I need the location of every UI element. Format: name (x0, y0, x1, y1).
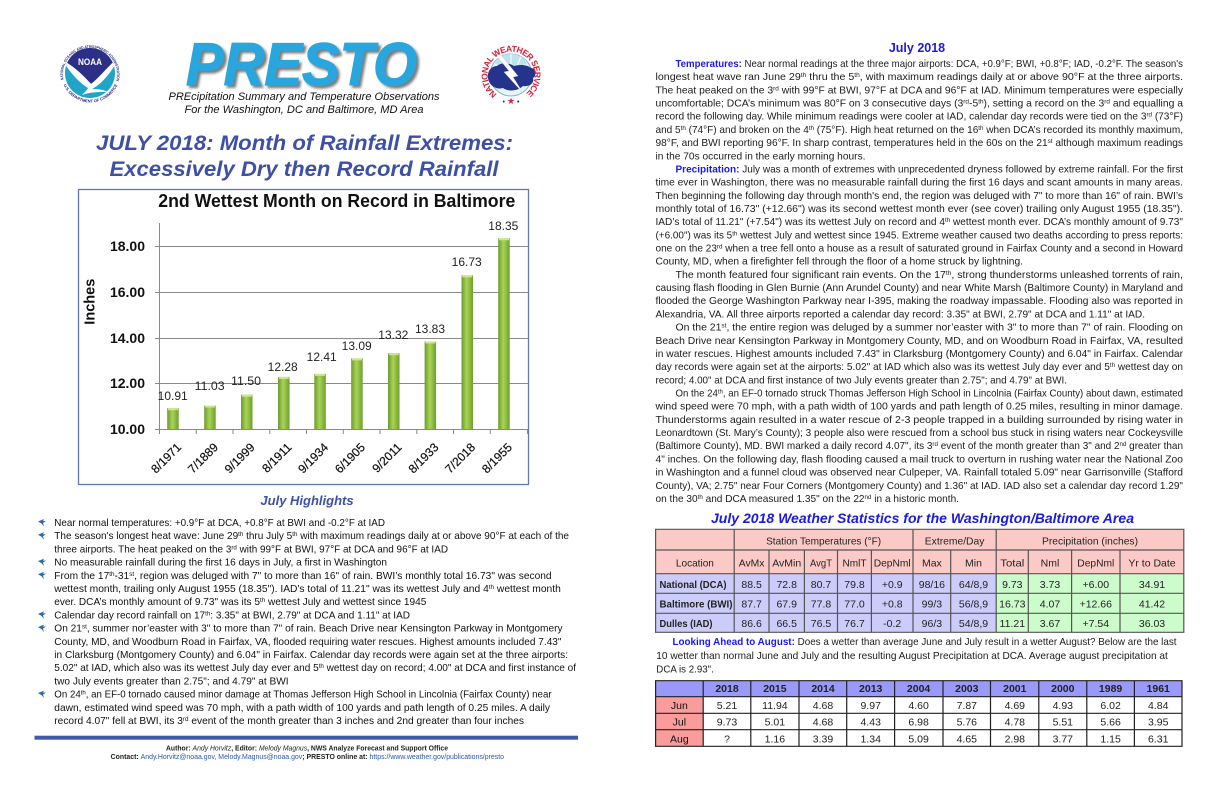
data labels: 11.03 (195, 381, 225, 393)
list: July highlights bullets: The season's longest heat wave: June 29 (54, 530, 247, 542)
x axis labels: 7/1889 (185, 440, 221, 476)
list: July highlights bullets: : 3.35" at BWI, 2.79" at DCA and 1.11" at IAD (210, 609, 410, 621)
row: June: 11.94 (762, 700, 788, 712)
text block: temperatures: when DCA’s recorded its monthly maximum, (983, 124, 1183, 136)
list: July highlights bullets: in Clarksburg (Montgomery County) and 6.04" in Fairfax. Calendar day records were again set at the three airports: (54, 649, 568, 661)
text block: 24th tornado: wind speed were 70 mph, with a path width of 100 yards and path length of 0.25 miles, resulting in minor damage. (655, 401, 1183, 413)
list: July highlights bullets: th (292, 531, 298, 538)
row: Baltimore: +12.66 (1080, 598, 1112, 610)
list: July highlights bullets: th (319, 663, 324, 670)
text block: 24th tornado: in a historic month. (872, 493, 959, 505)
row: June: 4.68 (813, 700, 833, 712)
row: July: Jul (673, 716, 686, 728)
list: July highlights bullets: with maximum readings daily at or above 90°F at each of the (297, 530, 569, 542)
year header row: 1961 (1147, 683, 1170, 695)
text block: temperatures: uncomfortable; DCA’s minimum was 80°F on 3 consecutive days (3 (656, 98, 968, 110)
list: July highlights bullets: with 99°F at BWI, 97°F at DCA and 96°F at IAD (237, 543, 448, 555)
y axis labels (110, 238, 145, 437)
chart title: 2nd Wettest Month on Record in Baltimore (158, 191, 515, 211)
text block: temperatures: longest heat wave ran June 29 (656, 71, 799, 83)
x axis labels: 9/1999 (222, 440, 258, 476)
table header row: Max (922, 558, 943, 570)
text block: precipitation: one on the 23 (656, 242, 720, 254)
text block: temperatures: th (801, 72, 807, 79)
row: National: 88.5 (741, 579, 762, 591)
table header row: NmlT (842, 558, 867, 570)
text block: temperatures: th (978, 125, 984, 132)
row: National (660, 579, 1165, 591)
row: Baltimore: 4.07 (1040, 598, 1060, 610)
row: Dulles: 76.7 (844, 618, 865, 630)
list: July highlights bullets (38, 517, 576, 727)
text block: temperatures: in the 70s occurred in the early morning hours. (656, 150, 866, 162)
row: July: 4.78 (1005, 716, 1025, 728)
text block: precipitation: IAD’s total of 11.21" (+7.54") was its wettest July on record and 4 (656, 216, 956, 228)
list: July highlights bullets: Calendar day record rainfall on 17 (54, 609, 212, 621)
list: July highlights bullets: st (129, 571, 134, 578)
list: July highlights bullets: wettest July and wettest since 1945 (265, 596, 426, 608)
row: August: 1.34 (860, 733, 881, 745)
y axis title: Inches (82, 279, 98, 325)
y axis labels: 10.00 (110, 421, 145, 437)
list: July highlights bullets: On 21 (54, 623, 83, 635)
list: July highlights bullets: th (109, 571, 115, 578)
x axis labels (148, 440, 515, 476)
text block: temperatures: th (809, 125, 814, 132)
year header row: 2014 (811, 683, 835, 695)
row: July: 5.76 (957, 716, 977, 728)
row: National: 98/16 (919, 579, 945, 591)
text block: 24th tornado (655, 388, 1183, 505)
y axis labels: 18.00 (110, 238, 145, 254)
text block: precipitation: (+6.00") was its 5 (656, 229, 737, 241)
row: Dulles: 36.03 (1139, 618, 1165, 630)
data labels: 11.50 (231, 376, 261, 388)
list: July highlights bullets: record 4.07" fell at BWI, its 3 (54, 715, 187, 727)
data labels: 13.32 (378, 330, 408, 342)
y axis labels: 14.00 (110, 330, 145, 346)
x axis labels: 7/2018 (442, 440, 478, 476)
table header row: DepNml (1077, 558, 1114, 570)
list: July highlights bullets: dawn, estimated wind speed was 70 mph, with a path width of 100 yards and path length of 0.25 miles. A daily (54, 702, 551, 714)
heading: July Highlights: July Highlights (260, 493, 354, 508)
data labels (158, 221, 518, 403)
year header row: 2000 (1051, 683, 1075, 695)
text block: 24th tornado: event of the month greater than 3" and 2 (938, 440, 1120, 452)
data labels: 12.28 (268, 362, 298, 374)
text block: temperatures: 98°F, and BWI reporting 96°F. In sharp contrast, temperatures held in the 60s on the 21 (656, 137, 1061, 149)
text block: four rain events (656, 269, 1183, 320)
text block: temperatures (656, 58, 1184, 162)
icon: NOAA logo: NATIONAL OCEANIC AND ATMOSPHERIC ADMINISTRATION (60, 45, 120, 82)
text block: precipitation: rd (717, 244, 723, 250)
text block: temperatures: th (681, 125, 686, 132)
row: June: 4.84 (1148, 700, 1169, 712)
table header row (676, 536, 1176, 570)
row: July: 5.01 (765, 716, 785, 728)
table header row: Nml (1041, 558, 1059, 570)
text block: 24th tornado: On the 24 (676, 388, 722, 400)
text block: precipitation: monthly total of 16.73" (+12.66") was its second wettest month ever (see cover) trailing only August 1955 (18.35"). (656, 203, 1183, 215)
row: August: Aug (670, 733, 689, 745)
list: July highlights bullets: On 24 (54, 689, 83, 701)
list: July highlights bullets: -31 (115, 570, 129, 582)
row: June: Jun (671, 700, 688, 712)
text block: temperatures: rd (963, 98, 969, 106)
icon: National Weather Service logo: NATIONAL WEATHER SERVICE (482, 46, 540, 98)
row: Baltimore (660, 598, 1165, 610)
row: Baltimore: 77.0 (844, 598, 865, 610)
icon: NOAA logo: NOAA (78, 57, 102, 68)
title: PRESTO logo: PRESTO (188, 34, 420, 100)
row: June: 4.93 (1053, 700, 1073, 712)
table header row: Station Temperatures (°F) (766, 536, 881, 548)
text block: 24th tornado: nd (1120, 441, 1127, 448)
row: Dulles: 11.21 (1000, 618, 1025, 630)
y axis labels: 16.00 (110, 284, 145, 300)
text block: temperatures: and 5 (656, 124, 682, 136)
text block: precipitation: Then beginning the following day through month's end, the region was deluged with 7" to more than 16" of rain. BWI’s (656, 190, 1183, 202)
text block: precipitation: th (945, 217, 951, 224)
text block: 21st nor'easter: , the entire region was deluged by a summer nor’easter with 3" to more than 7" of rain. Flooding on (726, 322, 1183, 334)
x axis labels: 8/1911 (259, 440, 295, 475)
x axis labels: 8/1955 (479, 440, 515, 476)
text block: 24th tornado: , an EF-0 tornado struck Thomas Jefferson High School in Lincolnia (Fairfax County) about dawn, estimated (723, 388, 1183, 400)
text block: temperatures: (75°F). High heat returned on the 16 (814, 124, 978, 136)
text block: 21st nor'easter: in water rescues. Highest amounts included 7.43" in Clarksburg (Montgomery County) and 6.04" in Fairfax. Calendar (656, 348, 1183, 360)
table header row: AvgT (810, 558, 833, 570)
text block: 24th tornado: greater than (1126, 440, 1183, 452)
text block: 24th tornado: on the 30 (656, 493, 699, 505)
subtitle: PREcipitation Summary and Temperature Observations (168, 91, 440, 103)
data labels: 18.35 (488, 221, 518, 233)
list: July highlights bullets: wettest month (494, 583, 561, 595)
list: July highlights bullets: 5.02" at IAD, which also was its wettest July day ever and 5 (54, 662, 331, 674)
year header row: 2001 (1003, 683, 1027, 695)
text block: temperatures: rd (1146, 112, 1152, 119)
y axis labels: 12.00 (110, 375, 145, 391)
heading: main title: JULY 2018: Month of Rainfall Extremes: (96, 131, 513, 155)
list: July highlights bullets: th (238, 531, 244, 538)
text block: temperatures: rd (1104, 98, 1110, 106)
bullet icons (38, 519, 46, 698)
table: June, July, August rainfall by year (656, 681, 1182, 746)
row: Baltimore: 67.9 (776, 598, 797, 610)
text block: four rain events: , strong thunderstorms unleashed torrents of rain, (951, 269, 1183, 281)
x axis labels: 6/1905 (332, 440, 368, 476)
list: July highlights bullets: th (489, 584, 494, 591)
row: National: 3.73 (1040, 579, 1060, 591)
row: June: 7.87 (957, 700, 977, 712)
text block: 24th tornado: and DCA measured 1.35" on the 22 (703, 493, 865, 505)
row: National: +0.9 (882, 579, 903, 591)
text block: looking ahead to August: Looking Ahead to August: Does a wetter than average June and July result in a wetter August? Below are the last (672, 636, 1177, 648)
text block: temperatures: Temperatures: Near normal readings at the three major airports: DCA, +0.9°F; BWI, +0.8°F; IAD, -0.2°F. The season's (676, 58, 1183, 70)
text block: precipitation: Precipitation: July was a month of extremes with unprecedented dryness followed by extreme rainfall. For the first (676, 163, 1183, 175)
list: July highlights bullets: st (82, 624, 87, 631)
text block: temperatures: st (1048, 138, 1053, 145)
row: Baltimore: 41.42 (1139, 598, 1165, 610)
text block: 21st nor'easter: On the 21 (676, 322, 722, 334)
subtitle: For the Washington, DC and Baltimore, MD Area (184, 104, 424, 116)
row: National: 80.7 (811, 579, 831, 591)
row: Dulles: 76.5 (811, 618, 831, 630)
text block: precipitation: th (732, 230, 738, 237)
text block: precipitation: wettest July and wettest since 1945. Extreme weather caused two deaths according to press reports: (737, 229, 1183, 241)
row: August: 1.16 (765, 733, 785, 745)
text block: 21st nor'easter: record; 4.00" at DCA and first instance of two July events greater than 2.75"; and 4.79" at BWI. (656, 374, 1067, 386)
row: July: 6.98 (908, 716, 929, 728)
row: Dulles (660, 618, 1165, 630)
row: Dulles: 66.5 (776, 618, 797, 630)
text block: 21st nor'easter: Beach Drive near Kensington Parkway in Montgomery County, MD, and on Woodburn Road in Fairfax, VA, resulted (656, 335, 1183, 347)
text block: temperatures: The heat peaked on the 3 (656, 84, 775, 96)
footer credits: Contact: Andy.Horvitz@noaa.gov, Melody.Magnus@noaa.gov; PRESTO online at: https://www.weather.gov/publications/presto (111, 752, 504, 761)
text block: temperatures: (74°F) and broken on the 4 (686, 124, 809, 136)
text block: temperatures: (73°F) (1152, 111, 1183, 123)
row: Dulles: 96/3 (922, 618, 942, 630)
text block: looking ahead to August (656, 636, 1177, 675)
text block: 21st nor'easter: th (1110, 362, 1115, 369)
row: Baltimore: 77.8 (811, 598, 831, 610)
text block: precipitation: wettest month ever. DCA’s monthly amount of 9.73" (950, 216, 1183, 228)
table header row: Min (965, 558, 982, 570)
row: July: 5.51 (1053, 716, 1073, 728)
table: July 2018 weather statistics (656, 529, 1184, 632)
x axis labels: 9/1934 (295, 440, 331, 476)
text block: precipitation: when a tree fell onto a house as a result of saturated ground in Fairfax County and a second in Howard (722, 242, 1183, 254)
row: Dulles: 86.6 (741, 618, 762, 630)
text block: precipitation: County, MD, when a firefighter fell through the floor of a home struck by lightning. (656, 256, 1023, 268)
list: July highlights bullets: rd (183, 716, 189, 723)
row: June: 6.02 (1100, 700, 1121, 712)
row: National: 9.73 (1002, 579, 1023, 591)
list: July highlights bullets: , region was deluged with 7" to more than 16" of rain. BWI’s monthly total 16.73" was second (134, 570, 552, 582)
text block: precipitation: time ever in Washington, there was no measurable rainfall during the first 16 days and scant amounts in many areas. (656, 177, 1183, 189)
text block: 24th tornado: Thunderstorms again resulted in a water rescue of 2-3 people trapped in a building surrounded by rising water in (656, 414, 1183, 426)
footer credits: Author: Andy Horvitz, Editor: Melody Magnus, NWS Analyze Forecast and Support Office (166, 744, 448, 752)
text block: four rain events: causing flash flooding in Glen Burnie (Ann Arundel County) and near White Marsh (Baltimore County) in Maryland and (656, 282, 1183, 294)
table header row: Precipitation (inches) (1042, 536, 1138, 548)
list: July highlights bullets: th (81, 690, 86, 697)
subtitle (168, 91, 440, 116)
table header row: DepNml (874, 558, 911, 570)
text block: temperatures: thru the 5 (806, 71, 854, 83)
text block: temperatures: -5 (969, 98, 978, 110)
text block: 21st nor'easter (656, 322, 1183, 386)
icon: NOAA logo: U.S. DEPARTMENT OF COMMERCE (64, 84, 118, 102)
text block: temperatures: with 99°F at BWI, 97°F at DCA and 96°F at IAD. Minimum temperatures were especially (779, 84, 1184, 96)
row: August: 2.98 (1005, 733, 1025, 745)
row: Dulles: 54/8,9 (959, 618, 988, 630)
text block: 24th tornado: Leonardtown (St. Mary’s County); 3 people also were rescued from a school bus stuck in rising waters near Cockeysville (656, 427, 1183, 439)
row: Baltimore: 56/8,9 (959, 598, 988, 610)
x axis labels: 8/1971 (148, 440, 184, 476)
list: July highlights bullets: No measurable rainfall during the first 16 days in July, a first in Washington (54, 557, 387, 569)
row: June (671, 700, 1169, 712)
year header row: 2018 (715, 683, 739, 695)
year header row: 2004 (907, 683, 930, 695)
row: Dulles: -0.2 (883, 618, 901, 630)
table header row: Total (1000, 558, 1024, 570)
text block: 24th tornado: County), VA; 2.75" near Four Corners (Montgomery County) and 1.36" at IAD. IAD also set a calendar day record 1.29" (656, 480, 1183, 492)
row: National: National (DCA) (660, 579, 726, 591)
row: July (673, 716, 1169, 728)
row: National: +6.00 (1083, 579, 1109, 591)
text block: temperatures: record the following day. While minimum readings were cooler at IAD, calendar day records were tied on the 3 (656, 111, 1166, 123)
text block: four rain events: The month featured four significant rain events. On the 17 (676, 269, 944, 281)
bar chart: 2nd wettest month on record in Baltimore (78, 190, 528, 484)
text block: temperatures: th (978, 98, 984, 106)
list: July highlights bullets: three airports. The heat peaked on the 3 (54, 543, 241, 555)
row: August: 5.09 (908, 733, 929, 745)
row: Baltimore: 87.7 (741, 598, 762, 610)
text block: 24th tornado: nd (865, 494, 872, 501)
year header row: 1989 (1099, 683, 1122, 695)
data labels: 10.91 (158, 391, 188, 403)
text block: 21st nor'easter: wettest day on (1115, 361, 1183, 373)
row: August: ? (724, 733, 730, 745)
table header row: Extreme/Day (925, 536, 985, 548)
heading: weather statistics table: July 2018 Weather Statistics for the Washington/Baltimore Area (711, 510, 1134, 526)
row: June: 4.60 (908, 700, 929, 712)
row: Baltimore: +0.8 (882, 598, 903, 610)
data labels: 13.83 (415, 324, 445, 336)
heading: July 2018: July 2018 (889, 41, 945, 55)
year header row: 2003 (955, 683, 979, 695)
text block: looking ahead to August: 10 wetter than normal June and July and the resulting August Precipitation at DCA. Average august precipitation at (656, 650, 1168, 662)
text block: temperatures: rd (773, 85, 779, 92)
row: July: 5.66 (1100, 716, 1121, 728)
list: July highlights bullets: rd (231, 544, 237, 551)
text block: temperatures: and equalling a (1110, 98, 1183, 110)
row: National: 34.91 (1139, 579, 1165, 591)
data labels: 16.73 (452, 257, 482, 269)
text block: 21st nor'easter: day records were again set at the airports: 5.02" at IAD which also was its wettest July day ever and 5 (656, 361, 1128, 373)
icon: NOAA logo (60, 45, 120, 102)
row: August: 3.77 (1053, 733, 1073, 745)
bar top highlights (168, 238, 509, 410)
row: Baltimore: 16.73 (999, 598, 1026, 610)
row: August (670, 733, 1169, 745)
row: Dulles: Dulles (IAD) (660, 618, 712, 630)
text block: temperatures: , with maximum readings daily at or above 90°F at the three airports. (860, 71, 1183, 83)
list: July highlights bullets: wettest day on record; 4.00" at DCA and first instance of (324, 662, 576, 674)
row: Dulles: 3.67 (1040, 618, 1060, 630)
table header row: Location (676, 558, 714, 570)
list: July highlights bullets: thru July 5 (243, 530, 292, 542)
table header row: AvMin (772, 558, 801, 570)
year header row: 2013 (859, 683, 883, 695)
heading: main title (96, 131, 513, 181)
row: National: 79.8 (844, 579, 865, 591)
year header row: 2015 (763, 683, 787, 695)
row: Baltimore: 99/3 (922, 598, 942, 610)
text block: 24th tornado: th (698, 494, 703, 501)
row: July: 9.73 (717, 716, 737, 728)
row: August: 3.39 (813, 733, 833, 745)
data labels: 13.09 (342, 341, 372, 353)
list: July highlights bullets: ever. DCA’s monthly amount of 9.73" was its 5 (54, 596, 269, 608)
row: July: 4.43 (860, 716, 881, 728)
text block: 24th tornado: 4" inches. On the following day, flash flooding caused a mail truck to overturn in rushing water near the National Zoo (656, 453, 1183, 465)
year header row (715, 683, 1170, 695)
text block: 24th tornado: rd (932, 441, 938, 448)
list: July highlights bullets: th (205, 610, 211, 617)
row: July: 3.95 (1148, 716, 1169, 728)
text block: 24th tornado: th (718, 388, 723, 396)
text block: four rain events: flooded the George Washington Parkway near I-395, making the roadway impassable. Flooding also was reported in (656, 295, 1183, 307)
text block: temperatures: although maximum readings (1053, 137, 1183, 149)
x axis labels: 9/2011 (369, 440, 405, 475)
row: Baltimore: Baltimore (BWI) (660, 598, 732, 610)
list: July highlights bullets: th (260, 597, 266, 604)
text block: precipitation (656, 163, 1183, 268)
data labels: 12.41 (307, 352, 337, 364)
text block: four rain events: Alexandria, VA. All three airports reported a calendar day record: 3.35" at BWI, 2.79" at DCA and 1.11" at IAD. (656, 308, 1145, 320)
list: July highlights bullets: From the 17 (54, 570, 111, 582)
row: National: 64/8,9 (959, 579, 988, 591)
row: July: 4.68 (813, 716, 833, 728)
text block: 21st nor'easter: st (721, 323, 727, 330)
row: June: 5.21 (717, 700, 737, 712)
list: July highlights bullets: , an EF-0 tornado caused minor damage at Thomas Jefferson High School in Lincolnia (Fairfax County) near (86, 689, 552, 701)
bars (167, 238, 510, 429)
row: August: 6.31 (1148, 733, 1169, 745)
list: July highlights bullets: two July events greater than 2.75"; and 4.79" at BWI (54, 675, 289, 687)
row: June: 9.97 (860, 700, 881, 712)
title: PRESTO logo: PRESTO (186, 31, 417, 98)
row: June: 4.69 (1005, 700, 1025, 712)
row: August: 4.65 (957, 733, 977, 745)
text block: 24th tornado: (Baltimore County), MD. BWI marked a daily record 4.07", its 3 (656, 440, 947, 452)
row: National: 72.8 (776, 579, 797, 591)
list: July highlights bullets: event of the month greater than 3 inches and 2nd greater than four inches (189, 715, 524, 727)
list: July highlights bullets: , summer nor’easter with 3" to more than 7" of rain. Beach Drive near Kensington Parkway in Montgomery (87, 623, 563, 635)
text block: temperatures: ), setting a record on the 3 (984, 98, 1104, 110)
list: July highlights bullets: County, MD, and Woodburn Road in Fairfax, VA, flooded requiring water rescues. Highest amounts included 7.43" (54, 636, 562, 648)
x axis labels: 8/1933 (406, 440, 442, 476)
row: Dulles: +7.54 (1083, 618, 1109, 630)
row: August: 1.15 (1100, 733, 1121, 745)
text block: looking ahead to August: DCA is 2.93". (656, 663, 714, 675)
list: July highlights bullets: Near normal temperatures: +0.9°F at DCA, +0.8°F at BWI and -0.2°F at IAD (54, 517, 385, 529)
icon: National Weather Service logo: • ★ • (503, 96, 520, 106)
footer credits (111, 744, 504, 761)
table header row: AvMx (739, 558, 765, 570)
table header row: Yr to Date (1128, 558, 1176, 570)
list: July highlights bullets: wettest month, trailing only August 1955 (18.35"). IAD's total of 11.21" was its wettest July and 4 (54, 583, 499, 595)
heading: main title: Excessively Dry then Record Rainfall (110, 157, 500, 181)
text block: four rain events: th (946, 270, 952, 277)
text block: 24th tornado: in Washington and a funnel cloud was observed near Culpeper, VA. Rainfall totaled 5.09" near Garrisonville (Stafford (656, 467, 1183, 479)
text block: temperatures: th (854, 72, 860, 79)
